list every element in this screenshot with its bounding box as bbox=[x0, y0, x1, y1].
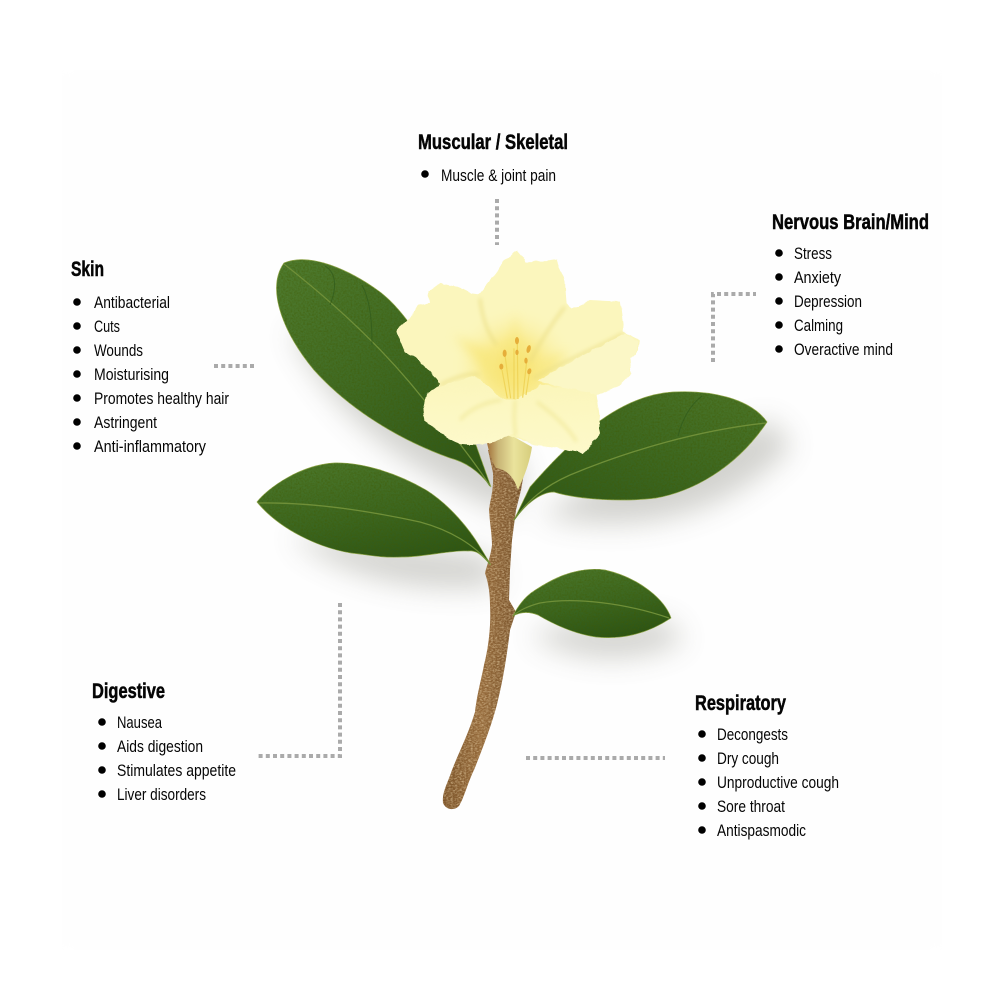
lower right lobe bbox=[537, 333, 638, 395]
list: digestive: Aids digestion bbox=[117, 737, 203, 756]
leaf: right bbox=[514, 392, 767, 520]
background panel bbox=[62, 70, 942, 950]
list: respiratory: Dry cough bbox=[717, 749, 779, 768]
throat colour bbox=[450, 308, 577, 422]
connector: skin bbox=[214, 364, 256, 368]
front petal shading bbox=[460, 400, 577, 442]
leaf: upper left bbox=[277, 260, 491, 487]
leaf shadows bbox=[290, 330, 792, 658]
list: nervous: Calming bbox=[794, 316, 843, 335]
list: nervous: Anxiety bbox=[794, 268, 841, 287]
flower bbox=[396, 250, 640, 453]
list: skin: Wounds bbox=[94, 341, 143, 360]
list: digestive: Liver disorders bbox=[117, 785, 206, 804]
list: respiratory: Unproductive cough bbox=[717, 773, 839, 792]
list: respiratory: Sore throat bbox=[717, 797, 785, 816]
list: digestive bbox=[98, 713, 236, 804]
connector: digestive bbox=[257, 603, 340, 756]
list: skin bbox=[73, 293, 229, 456]
leaf: small lower right bbox=[513, 569, 671, 638]
heading: nervous brain/mind: Nervous Brain/Mind bbox=[772, 211, 929, 234]
list: nervous: Depression bbox=[794, 292, 862, 311]
list: nervous: Overactive mind bbox=[794, 340, 893, 359]
connector: nervous bbox=[713, 294, 756, 362]
heading: digestive: Digestive bbox=[92, 680, 165, 703]
list: skin: Promotes healthy hair bbox=[94, 389, 229, 408]
heading: respiratory: Respiratory bbox=[695, 692, 786, 715]
list: nervous: Stress bbox=[794, 244, 832, 263]
panel: skin bbox=[71, 258, 229, 456]
list: respiratory: Decongests bbox=[717, 725, 788, 744]
leaf: lower left bbox=[257, 463, 491, 565]
front petal right bbox=[513, 385, 600, 453]
connector: respiratory bbox=[526, 756, 665, 760]
list: nervous bbox=[775, 244, 893, 359]
list: respiratory bbox=[698, 725, 839, 840]
list: skin: Antibacterial bbox=[94, 293, 170, 312]
bullet item: Muscle & joint pain bbox=[441, 166, 556, 185]
flower tube bbox=[487, 433, 532, 490]
panel: nervous brain/mind bbox=[772, 211, 929, 359]
connector: muscular bbox=[495, 199, 499, 245]
list: skin: Cuts bbox=[94, 317, 120, 336]
list: digestive: Stimulates appetite bbox=[117, 761, 236, 780]
petal creases bbox=[440, 298, 623, 385]
list: digestive: Nausea bbox=[117, 713, 162, 732]
plant illustration bbox=[257, 250, 792, 809]
front petal left bbox=[424, 377, 517, 445]
panel: digestive bbox=[92, 680, 236, 804]
panel: muscular / skeletal bbox=[418, 131, 568, 185]
list: skin: Anti-inflammatory bbox=[94, 437, 206, 456]
panel: respiratory bbox=[695, 692, 839, 840]
heading: muscular / skeletal: Muscular / Skeletal bbox=[418, 131, 568, 154]
stamens bbox=[499, 337, 532, 399]
flower outline bbox=[396, 250, 640, 453]
stem bbox=[443, 450, 528, 809]
list: skin: Astringent bbox=[94, 413, 157, 432]
heading: skin: Skin bbox=[71, 258, 104, 281]
list: respiratory: Antispasmodic bbox=[717, 821, 806, 840]
list: skin: Moisturising bbox=[94, 365, 169, 384]
